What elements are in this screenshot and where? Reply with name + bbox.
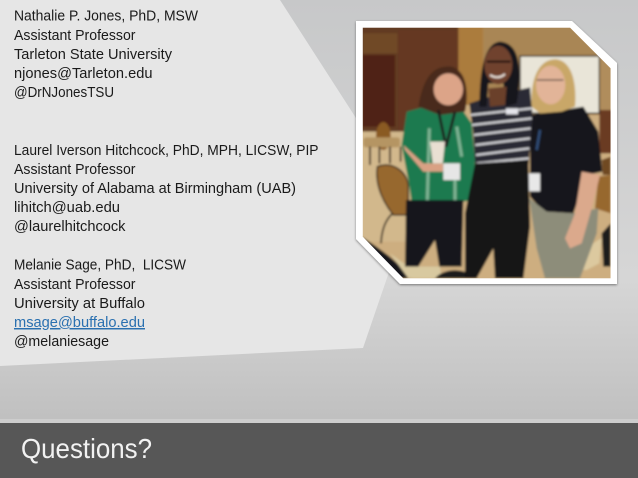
title bar [0, 419, 638, 478]
speaker: Laurel Iverson Hitchcock: lihitch@uab.edu [14, 200, 120, 216]
speaker: Laurel Iverson Hitchcock: University of Alabama at Birmingham (UAB) [14, 181, 296, 197]
title: Questions? [21, 433, 152, 464]
person: right woman [530, 107, 602, 213]
speaker: Laurel Iverson Hitchcock: Assistant Professor [14, 162, 136, 178]
speaker: Nathalie P. Jones: njones@Tarleton.edu [14, 66, 152, 82]
photo: three presenters [360, 25, 613, 282]
chairs [376, 122, 391, 150]
light text panel [0, 0, 412, 366]
speaker: Melanie Sage: @melaniesage [14, 334, 109, 350]
person: middle woman [469, 87, 533, 168]
whiteboard [520, 56, 599, 113]
speaker contact details [14, 8, 319, 350]
speaker: Melanie Sage: University at Buffalo [14, 296, 145, 312]
speaker: Melanie Sage: Melanie Sage, PhD, LICSW [14, 258, 186, 274]
speaker: Nathalie P. Jones: Nathalie P. Jones, PhD, MSW [14, 8, 198, 24]
speaker: Nathalie P. Jones [14, 8, 198, 101]
speaker: Laurel Iverson Hitchcock: Laurel Iverson Hitchcock, PhD, MPH, LICSW, PIP [14, 143, 319, 159]
person: left woman [402, 103, 475, 205]
room [368, 104, 611, 278]
speaker: Laurel Iverson Hitchcock [14, 143, 319, 235]
speaker: Melanie Sage: msage@buffalo.edu [14, 315, 145, 331]
speaker: Nathalie P. Jones: Tarleton State University [14, 47, 173, 63]
speaker: Melanie Sage [14, 258, 186, 350]
speaker: Nathalie P. Jones: Assistant Professor [14, 28, 136, 44]
speaker: Melanie Sage: Assistant Professor [14, 277, 136, 293]
badge [443, 163, 460, 180]
photo frame [356, 21, 617, 284]
speaker: Laurel Iverson Hitchcock: @laurelhitchcock [14, 219, 126, 235]
coffee cup [430, 142, 445, 163]
speaker: Nathalie P. Jones: @DrNJonesTSU [14, 85, 114, 101]
